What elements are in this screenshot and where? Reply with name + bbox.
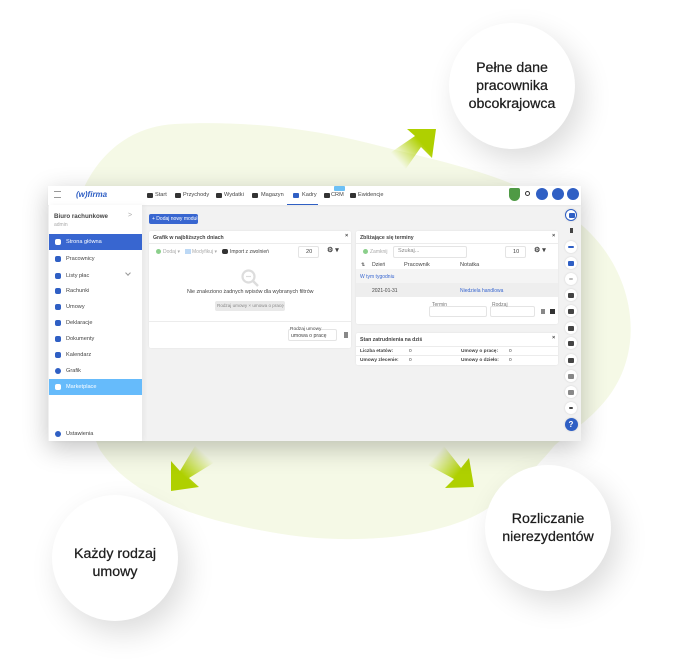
account role: admin bbox=[54, 222, 68, 228]
contract select value: umowa o pracę bbox=[291, 332, 326, 338]
page size: 20 bbox=[306, 249, 312, 255]
callout: foreign employee data: obcokrajowca bbox=[469, 96, 555, 112]
rail: car bbox=[565, 289, 577, 301]
panel: schedule bbox=[149, 231, 351, 348]
menu: Umowy bbox=[55, 304, 85, 310]
nav: CRM bbox=[324, 192, 344, 198]
callout: non-resident settlement bbox=[485, 465, 611, 591]
stat: umowy o pracę: Umowy o pracę: bbox=[461, 348, 498, 354]
menu: Pracownicy: Pracownicy bbox=[66, 256, 95, 262]
menu: Dokumenty: Dokumenty bbox=[66, 336, 94, 342]
icon: user bbox=[567, 188, 579, 200]
rail: print bbox=[565, 354, 577, 366]
rail: down bbox=[565, 402, 577, 414]
callout: foreign employee data bbox=[449, 23, 575, 149]
menu: Grafik: Grafik bbox=[66, 368, 81, 374]
menu: Grafik bbox=[55, 368, 81, 374]
stat: etaty: Liczba etatów: bbox=[360, 348, 393, 354]
menu: Rachunki: Rachunki bbox=[66, 288, 89, 294]
close icon: × bbox=[345, 233, 348, 239]
menu: Umowy: Umowy bbox=[66, 304, 85, 310]
menu icon bbox=[54, 191, 61, 198]
app window screenshot bbox=[48, 186, 581, 441]
menu: Deklaracje: Deklaracje bbox=[66, 320, 92, 326]
page size: 10 bbox=[513, 249, 519, 255]
table header: day: Dzień bbox=[372, 262, 385, 268]
nav: Start bbox=[147, 192, 167, 198]
logo: (w)firma bbox=[76, 190, 107, 199]
nav: Start: Start bbox=[155, 192, 167, 198]
rail: up bbox=[565, 273, 577, 285]
active tab underline bbox=[287, 204, 318, 205]
date row: Niedziela handlowa bbox=[460, 288, 503, 294]
settings icon: ⚙ ▾ bbox=[534, 247, 546, 254]
panel heading: Stan zatrudnienia na dziś bbox=[360, 336, 422, 342]
date row: 2021-01-31 bbox=[372, 288, 398, 294]
panel: employment status bbox=[356, 333, 558, 365]
rail: add bbox=[565, 241, 577, 253]
close icon: × bbox=[552, 335, 555, 341]
expand chevron: > bbox=[128, 212, 132, 219]
callout: foreign employee data: pracownika bbox=[476, 78, 548, 94]
icon: cart bbox=[552, 188, 564, 200]
nav: Ewidencje: Ewidencje bbox=[358, 192, 384, 198]
page size bbox=[298, 246, 319, 258]
import icon bbox=[222, 249, 228, 254]
account name: Biuro rachunkowe bbox=[54, 213, 108, 220]
submenu chevron bbox=[125, 270, 131, 276]
icon: shield bbox=[509, 188, 520, 201]
panel heading: Grafik w najbliższych dniach bbox=[153, 234, 224, 240]
nav: Kadry bbox=[293, 192, 317, 198]
term select label: Termin bbox=[432, 302, 447, 308]
stat: umowy zlecenie: Umowy zlecenie: bbox=[360, 358, 399, 362]
rail: sort bbox=[570, 228, 573, 233]
import action: Import z zwolnień bbox=[230, 249, 269, 255]
callout: foreign employee data: Pełne dane bbox=[476, 60, 548, 76]
menu: Ustawienia: Ustawienia bbox=[66, 431, 93, 437]
panel: employment status: 0 bbox=[409, 348, 412, 354]
menu: Strona główna bbox=[49, 234, 142, 250]
callout: every contract type: Każdy rodzaj bbox=[74, 546, 156, 562]
contract select label bbox=[290, 326, 321, 334]
rail: list bbox=[565, 209, 577, 221]
page size bbox=[505, 246, 526, 258]
sidebar bbox=[49, 205, 142, 441]
search field bbox=[393, 246, 467, 258]
trash icon bbox=[541, 309, 545, 314]
add module button: + Dodaj nowy moduł bbox=[152, 216, 197, 222]
menu: Marketplace bbox=[49, 379, 142, 395]
contract select bbox=[288, 329, 337, 341]
panel: employment status: 0 bbox=[409, 358, 412, 362]
close button: Zamknij bbox=[370, 249, 388, 255]
empty state icon bbox=[242, 270, 259, 287]
menu: Strona główna: Strona główna bbox=[66, 239, 102, 245]
menu: Listy płac: Listy płac bbox=[66, 273, 89, 279]
settings icon: ⚙ ▾ bbox=[327, 247, 339, 254]
callout: every contract type bbox=[52, 495, 178, 621]
status dot bbox=[363, 249, 368, 254]
right icon rail bbox=[564, 208, 578, 432]
rail: person bbox=[565, 322, 577, 334]
empty state message: Nie znaleziono żadnych wpisów dla wybranych filtrów bbox=[187, 288, 314, 294]
menu: Rachunki bbox=[55, 288, 89, 294]
trash icon bbox=[344, 332, 348, 338]
panel heading: Zbliżające się terminy bbox=[360, 234, 414, 240]
term select bbox=[429, 306, 487, 317]
modify icon bbox=[185, 249, 191, 254]
menu: Listy płac bbox=[55, 273, 90, 279]
callout: every contract type: umowy bbox=[93, 564, 137, 580]
nav: Kadry: Kadry bbox=[302, 192, 317, 198]
type select label: Rodzaj bbox=[492, 302, 508, 308]
menu: Kalendarz bbox=[55, 352, 91, 358]
add status dot bbox=[156, 249, 161, 254]
filter icon bbox=[550, 309, 555, 314]
rail: save bbox=[565, 337, 577, 349]
rail: help: ? bbox=[569, 420, 573, 428]
filter tag: Rodzaj umowy × umowa o pracę bbox=[217, 302, 284, 308]
rail: money two bbox=[565, 386, 577, 398]
search field: Szukaj... bbox=[398, 248, 419, 254]
top navigation bar bbox=[48, 186, 581, 205]
menu: Marketplace: Marketplace bbox=[66, 384, 96, 390]
rail: help bbox=[564, 418, 578, 430]
stat: etaty bbox=[360, 348, 412, 354]
beta badge bbox=[334, 186, 345, 191]
nav: Magazyn: Magazyn bbox=[261, 192, 284, 198]
table header: note: Notatka bbox=[460, 262, 479, 268]
nav: Wydatki: Wydatki bbox=[224, 192, 244, 198]
callout: non-resident settlement: Rozliczanie bbox=[512, 511, 584, 527]
add module button bbox=[149, 214, 198, 224]
type select bbox=[490, 306, 535, 317]
filter tag bbox=[215, 300, 285, 310]
week band bbox=[356, 269, 558, 283]
date row bbox=[356, 283, 558, 297]
add action: Dodaj ▾ bbox=[163, 249, 180, 255]
rail: settings bbox=[565, 257, 577, 269]
week band: W tym tygodniu bbox=[360, 274, 394, 280]
table header: employee: Pracownik bbox=[404, 262, 430, 268]
panel: employment status: 0 bbox=[509, 348, 512, 354]
nav: CRM: CRM bbox=[331, 192, 344, 198]
sort icon: ⇅ bbox=[361, 262, 365, 268]
rail: cart bbox=[565, 305, 577, 317]
callout: non-resident settlement: nierezydentów bbox=[502, 529, 594, 545]
stat: umowy o dzieło: Umowy o dzieło: bbox=[461, 358, 499, 362]
close icon: × bbox=[552, 233, 555, 239]
icon: help bbox=[536, 188, 548, 200]
icon: search bbox=[525, 191, 530, 196]
panel: employment status: 0 bbox=[509, 358, 512, 362]
nav: Przychody: Przychody bbox=[183, 192, 209, 198]
modify action: Modyfikuj ▾ bbox=[192, 249, 217, 255]
contract select label: Rodzaj umowy bbox=[290, 326, 321, 332]
rail: money one bbox=[565, 370, 577, 382]
menu: Kalendarz: Kalendarz bbox=[66, 352, 91, 358]
panel: deadlines bbox=[356, 231, 558, 324]
